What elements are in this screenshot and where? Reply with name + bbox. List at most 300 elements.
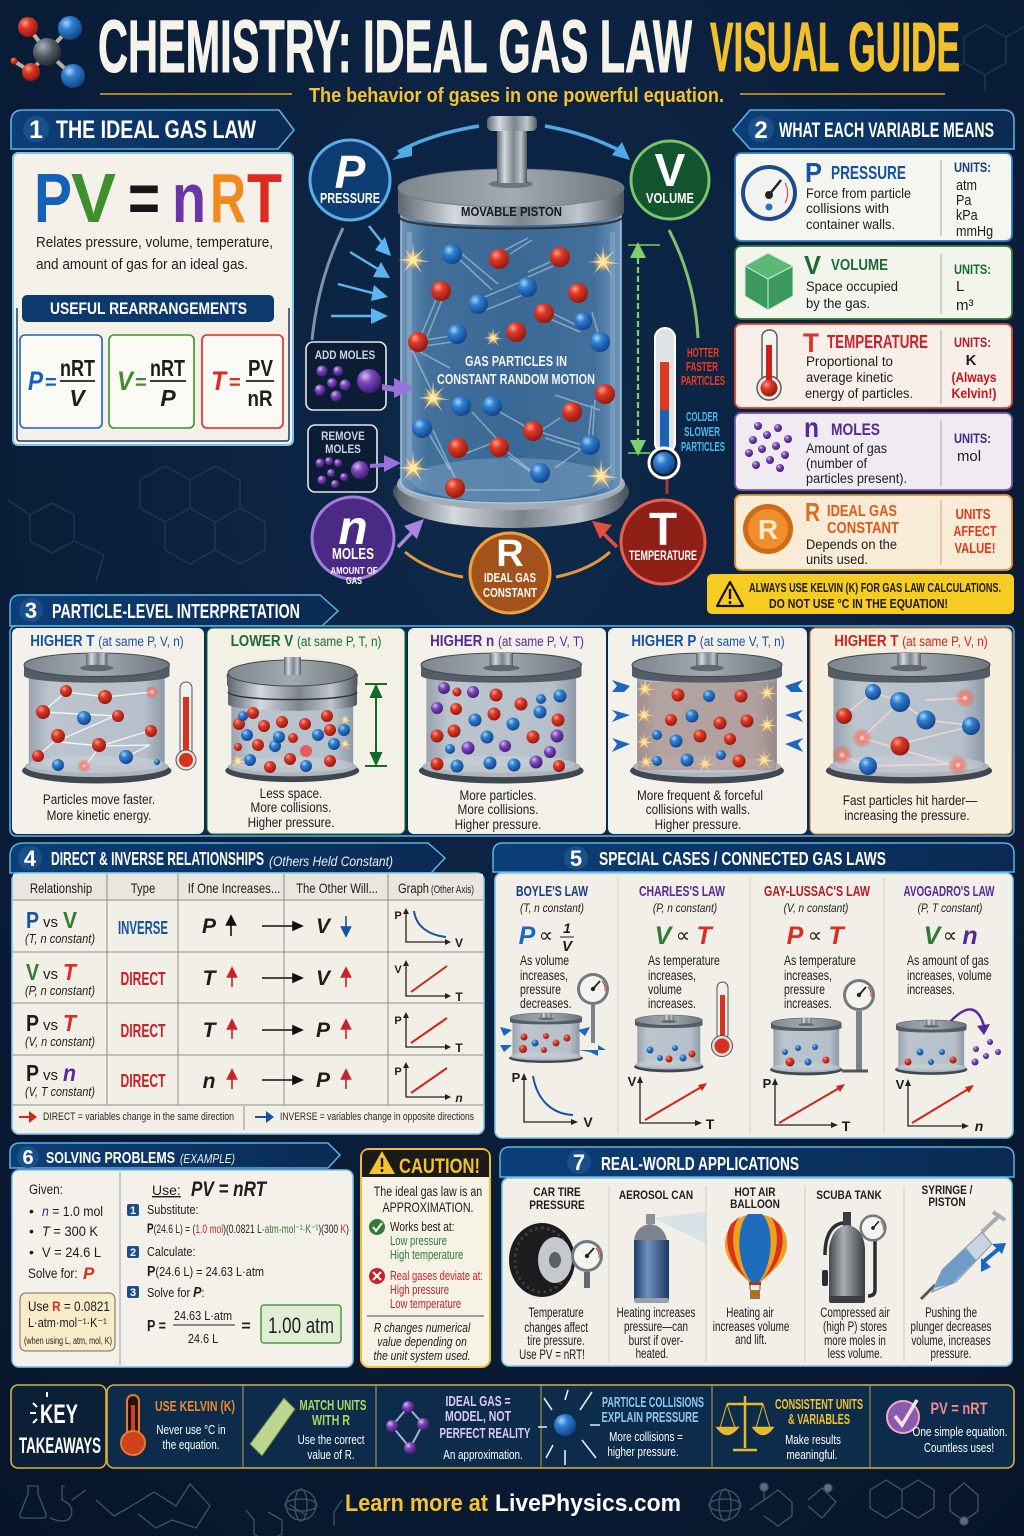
- graph: [896, 1077, 983, 1134]
- panel: the ideal gas law: [13, 153, 293, 445]
- column: Gay-Lussac's law: T: [828, 922, 846, 950]
- icon: thermometer: [757, 330, 781, 400]
- column: Boyle's law: 1: [563, 920, 571, 936]
- particle motion trails: [412, 238, 600, 490]
- takeaway: match units: MATCH UNITS: [300, 1397, 366, 1414]
- card: pressure: container walls.: [806, 217, 895, 232]
- row: P vs V: V: [63, 907, 78, 933]
- thermometer: [712, 982, 732, 1056]
- box: V equation: =: [135, 372, 147, 394]
- step 1: [127, 1202, 349, 1236]
- row: P vs T: DIRECT: [120, 1021, 166, 1041]
- card: temperature: [735, 324, 1012, 408]
- badge: moles: MOLES: [332, 546, 374, 563]
- takeaway: consistent units: meaningful.: [787, 1449, 837, 1462]
- icon: pressure gauge: [741, 165, 797, 221]
- takeaway: collisions: More collisions =: [609, 1431, 683, 1444]
- footer chemistry icons: [20, 1480, 978, 1536]
- card: pressure: atm: [956, 176, 977, 193]
- row: P vs T: P: [26, 1010, 39, 1036]
- section 3 heading: [10, 595, 338, 626]
- mini graph: inverse P V: [394, 908, 463, 950]
- rearrangements frame: [17, 308, 289, 441]
- row: P vs V: vs: [43, 914, 58, 931]
- takeaway: collisions: higher pressure.: [607, 1446, 679, 1459]
- box: P equation: P: [28, 366, 44, 396]
- mini graph: direct P T: T: [455, 1041, 463, 1055]
- remove moles box: REMOVE: [321, 430, 365, 443]
- takeaway: PV = nRT: PV = nRT: [930, 1399, 988, 1418]
- panel: caution: The ideal gas law is an: [374, 1184, 482, 1199]
- icon: volume cube: [745, 253, 793, 310]
- panel: higher T: Particles move faster.: [43, 791, 155, 807]
- R value note: L·atm·mol⁻¹·K⁻¹: [28, 1315, 107, 1330]
- row: P vs n: P: [26, 1060, 39, 1086]
- add moles box: ADD MOLES: [315, 349, 375, 362]
- graph: P: [763, 1076, 772, 1091]
- row: P vs V: INVERSE: [118, 918, 168, 938]
- panel: lower V: Less space.: [260, 785, 322, 801]
- cylinder caption: [437, 353, 595, 388]
- panel: lower V: LOWER V (at same P, T, n): [231, 633, 381, 650]
- column: Gay-Lussac's law: [763, 883, 875, 1134]
- application: syringe: volume, increases: [911, 1332, 991, 1348]
- column: Avogadro's law: V: [924, 922, 943, 950]
- row: P vs V: V: [316, 915, 332, 938]
- panel: higher T pressure: HIGHER T (at same P, V, n): [834, 633, 988, 650]
- hotter label: PARTICLES: [681, 373, 725, 388]
- application: aerosol can: burst if over-: [629, 1332, 683, 1348]
- row: P vs T: T: [203, 1019, 218, 1042]
- table header: [30, 881, 474, 896]
- application: scuba tank: SCUBA TANK: [816, 1189, 882, 1202]
- card: ideal gas constant: units used.: [806, 552, 868, 567]
- given values: V = 24.6 L: [42, 1244, 101, 1260]
- box: V equation: P: [160, 385, 176, 411]
- card: moles: (number of: [806, 456, 867, 471]
- mini graph: direct P T: P: [394, 1015, 402, 1027]
- card: ideal gas constant: [735, 495, 1012, 570]
- graph: V: [583, 1114, 593, 1130]
- mini graph: direct P n: P: [394, 1066, 402, 1078]
- takeaway: use Kelvin: [121, 1395, 235, 1455]
- box: T equation: nR: [248, 386, 273, 411]
- panel: lower V: Higher pressure.: [248, 814, 334, 830]
- takeaway: consistent units: & VARIABLES: [788, 1411, 850, 1428]
- column: Boyle's law: decreases.: [520, 996, 571, 1011]
- R value note: Use R = 0.0821: [28, 1298, 110, 1314]
- icon: cross: [369, 1268, 385, 1284]
- column: Avogadro's law: n: [962, 922, 978, 950]
- arrow: add moles: [382, 378, 414, 398]
- application: car tire: [509, 1186, 603, 1362]
- key takeaways strip: [11, 1385, 1014, 1468]
- formula PV = nRT: R: [210, 159, 246, 237]
- section 6 heading: SOLVING PROBLEMS: [46, 1150, 175, 1167]
- colder label: [681, 409, 725, 454]
- card: volume: Space occupied: [806, 278, 898, 294]
- application: aerosol can: pressure—can: [624, 1318, 688, 1334]
- legend: DIRECT = variables change in the same direction: [43, 1111, 234, 1123]
- card: temperature: Kelvin!): [952, 385, 996, 401]
- thermometer: [649, 328, 679, 478]
- card: pressure: mmHg: [956, 222, 993, 239]
- step 2: 2: [130, 1247, 136, 1259]
- column: Charles's law: ∝: [676, 925, 690, 947]
- row: P vs T: vs: [43, 1017, 58, 1034]
- panel: higher T: [12, 628, 204, 834]
- card: temperature: TEMPERATURE: [827, 332, 928, 352]
- badge: pressure: PRESSURE: [320, 190, 380, 207]
- key takeaways label: [11, 1385, 106, 1468]
- given values: [28, 1181, 103, 1283]
- answer box: 1.00 atm: [268, 1313, 334, 1338]
- box: V equation: V: [117, 366, 135, 396]
- table header: (Other Axis): [431, 884, 474, 896]
- panel: higher P: HIGHER P (at same V, T, n): [631, 633, 785, 650]
- add moles box: [306, 342, 386, 410]
- takeaway: match units: value of R.: [307, 1449, 355, 1462]
- formula description: and amount of gas for an ideal gas.: [36, 256, 248, 273]
- blue arrows: [500, 1027, 606, 1056]
- section 3 heading: PARTICLE-LEVEL INTERPRETATION: [52, 601, 300, 623]
- step 3: 3: [130, 1287, 136, 1299]
- mini graph: inverse P V: P: [394, 910, 402, 922]
- mini cylinder: [509, 1013, 583, 1063]
- mini graph: direct V T: V: [394, 964, 402, 976]
- step 2: [127, 1244, 264, 1280]
- table header: Relationship: [30, 881, 92, 896]
- column: Avogadro's law: [895, 883, 1001, 1134]
- column: Gay-Lussac's law: increases.: [784, 996, 832, 1011]
- subtitle: The behavior of gases in one powerful equation.: [309, 85, 724, 107]
- column: Gay-Lussac's law: pressure: [784, 982, 825, 997]
- takeaway: PV = nRT: Countless uses!: [924, 1442, 994, 1455]
- icon: syringe: [921, 1212, 1006, 1299]
- column: Gay-Lussac's law: (V, n constant): [784, 902, 849, 915]
- remove moles box: [308, 425, 377, 492]
- application: syringe: SYRINGE /: [922, 1184, 972, 1197]
- takeaway: match units: [250, 1397, 366, 1462]
- gas dots: [972, 1039, 1001, 1066]
- card: temperature: T: [803, 328, 819, 358]
- panel: higher P: collisions with walls.: [646, 801, 750, 817]
- column: Avogadro's law: ∝: [943, 925, 957, 947]
- takeaway: PV = nRT: [887, 1399, 1008, 1455]
- step 2: Calculate:: [147, 1244, 196, 1259]
- row: P vs V: [25, 907, 350, 946]
- card: temperature: (Always: [952, 369, 997, 385]
- icon: check badge: [887, 1400, 919, 1433]
- given values: T = 300 K: [42, 1223, 99, 1239]
- panel: caution: the unit system used.: [374, 1349, 470, 1363]
- badge: moles: [312, 497, 394, 587]
- takeaway: match units: Use the correct: [298, 1434, 365, 1447]
- card: moles: mol: [957, 448, 981, 465]
- answer box: [261, 1305, 341, 1343]
- section 6 heading: [10, 1143, 340, 1169]
- collision sparks: [634, 678, 778, 772]
- application: syringe: [911, 1184, 1006, 1361]
- mini cylinder: [895, 1020, 967, 1075]
- card: moles: [735, 412, 1012, 490]
- badge: volume: VOLUME: [646, 190, 694, 207]
- card: ideal gas constant: CONSTANT: [827, 520, 899, 537]
- section 5 heading: SPECIAL CASES / CONNECTED GAS LAWS: [599, 849, 886, 869]
- column: Boyle's law: [500, 883, 609, 1130]
- formula PV = nRT: n: [172, 159, 206, 237]
- formula PV = nRT: T: [247, 159, 282, 237]
- R value note: [20, 1293, 115, 1351]
- application: aerosol can: Heating increases: [617, 1304, 695, 1320]
- legend: [19, 1111, 474, 1123]
- card: moles: Amount of gas: [806, 441, 887, 456]
- takeaway: model: PERFECT REALITY: [440, 1425, 530, 1442]
- icon: balloon: [725, 1214, 787, 1299]
- application: syringe: PISTON: [928, 1196, 966, 1209]
- application: scuba tank: (high P) stores: [823, 1318, 887, 1334]
- column: Charles's law: CHARLES'S LAW: [639, 883, 726, 900]
- badge: pressure: [310, 140, 390, 220]
- application: scuba tank: [816, 1189, 890, 1361]
- column: Avogadro's law: increases.: [907, 982, 955, 997]
- box: P equation: V: [69, 385, 86, 411]
- graph: V: [628, 1074, 637, 1089]
- panel: caution: Real gases deviate at:: [390, 1268, 483, 1283]
- panel: higher P: Higher pressure.: [655, 816, 741, 832]
- badge: volume: V: [655, 144, 686, 196]
- panel: higher n: HIGHER n (at same P, V, T): [430, 633, 584, 650]
- row: P vs n: [25, 1060, 350, 1099]
- card: volume: [735, 246, 1012, 319]
- panel: higher n: [408, 628, 606, 834]
- step 3: Solve for P:: [147, 1283, 205, 1300]
- colder label: PARTICLES: [681, 439, 725, 454]
- graph: T: [842, 1118, 851, 1134]
- movable piston: MOVABLE PISTON: [461, 204, 562, 219]
- badge: ideal gas constant: IDEAL GAS: [484, 570, 536, 585]
- icon: ruler: [250, 1398, 295, 1456]
- column: Charles's law: As temperature: [648, 953, 720, 968]
- box: P equation: nRT: [60, 355, 95, 381]
- card: temperature: K: [966, 352, 977, 369]
- section 1 heading: [11, 110, 294, 149]
- icon: balance scales: [718, 1396, 772, 1450]
- application: syringe: plunger decreases: [911, 1318, 992, 1334]
- row: P vs T: P: [316, 1019, 331, 1042]
- row: P vs T: T: [63, 1010, 78, 1036]
- row: P vs V: P: [26, 907, 39, 933]
- card: temperature: Proportional to: [806, 354, 893, 369]
- step 1: Substitute:: [147, 1202, 199, 1217]
- blue compression arrows: [612, 680, 803, 752]
- graph: [628, 1074, 715, 1132]
- table header: If One Increases...: [188, 881, 280, 896]
- badge: volume: [631, 141, 709, 219]
- footer link: Learn more at: [345, 1490, 488, 1517]
- takeaway: use Kelvin: Never use °C in: [156, 1424, 226, 1437]
- badge: ideal gas constant: CONSTANT: [483, 585, 537, 600]
- application: car tire: PRESSURE: [529, 1199, 585, 1212]
- formula PV = nRT: P: [34, 159, 72, 237]
- card: volume: VOLUME: [831, 257, 888, 274]
- card: ideal gas constant: AFFECT: [954, 523, 996, 540]
- mini graph: direct P T: [394, 1012, 463, 1055]
- card: ideal gas constant: R: [805, 497, 820, 527]
- box: V equation: [109, 335, 194, 428]
- column: Charles's law: volume: [648, 982, 682, 997]
- row: P vs n: n: [203, 1070, 215, 1093]
- formula PV = nRT: V: [71, 159, 116, 237]
- application: car tire: tire pressure.: [527, 1332, 585, 1348]
- add-moles arrow: [950, 1009, 990, 1035]
- card: pressure: Pa: [956, 191, 972, 208]
- box: T equation: =: [229, 372, 241, 394]
- row: V vs T: T: [63, 959, 78, 985]
- panel: higher n: More collisions.: [458, 801, 538, 817]
- use equation: Use:: [152, 1182, 181, 1198]
- step 1: P(24.6 L) = (1.0 mol)(0.0821 L·atm·mol⁻¹·K⁻¹)(300 K): [147, 1220, 349, 1236]
- row: V vs T: [25, 959, 350, 998]
- use equation: PV = nRT: [191, 1178, 268, 1201]
- section 2 heading: 2: [754, 117, 768, 144]
- card: moles: particles present).: [806, 471, 907, 486]
- icon: warning triangle: [369, 1151, 395, 1174]
- key takeaways label: KEY: [40, 1399, 78, 1429]
- volume height arrow: [628, 242, 660, 456]
- section 4 heading: DIRECT & INVERSE RELATIONSHIPS: [51, 849, 264, 869]
- spark dots: [230, 713, 352, 768]
- icon: spray can: [634, 1212, 707, 1303]
- card: volume: L: [956, 278, 964, 295]
- molecule icon: [10, 16, 85, 88]
- card: pressure: collisions with: [806, 201, 889, 216]
- section 7 heading: REAL-WORLD APPLICATIONS: [601, 1154, 799, 1174]
- column: Boyle's law: As volume: [520, 953, 569, 968]
- panel: applications: [502, 1178, 1012, 1366]
- application: car tire: changes affect: [524, 1319, 589, 1335]
- row: P vs n: vs: [43, 1067, 58, 1084]
- application: scuba tank: more moles in: [824, 1332, 886, 1348]
- column: Boyle's law: V: [562, 938, 574, 955]
- column: Boyle's law: pressure: [520, 982, 561, 997]
- graph: P: [512, 1070, 521, 1085]
- panel: higher n: Higher pressure.: [455, 816, 541, 832]
- panel: lower V: [207, 628, 405, 834]
- legend: INVERSE = variables change in opposite directions: [280, 1111, 474, 1123]
- column: Charles's law: [628, 883, 732, 1132]
- column: Boyle's law: (T, n constant): [520, 902, 584, 915]
- given values: Solve for:: [28, 1265, 78, 1281]
- card: moles: UNITS:: [954, 430, 991, 446]
- panel: higher P: [608, 628, 807, 834]
- hotter label: HOTTER: [687, 345, 719, 360]
- badge: moles: AMOUNT OF: [330, 565, 378, 577]
- footer link: [345, 1490, 681, 1517]
- card: volume: UNITS:: [954, 261, 991, 277]
- panel: caution: APPROXIMATION.: [383, 1200, 473, 1215]
- panel: caution: Works best at:: [390, 1220, 455, 1234]
- given values: •: [29, 1223, 34, 1239]
- row: P vs n: P: [316, 1069, 331, 1092]
- step 3: =: [241, 1318, 251, 1335]
- given values: •: [29, 1244, 34, 1260]
- column: Gay-Lussac's law: GAY-LUSSAC'S LAW: [764, 883, 871, 900]
- application: scuba tank: Compressed air: [820, 1304, 890, 1320]
- step 3: P =: [147, 1318, 166, 1335]
- warning banner: always use Kelvin: [707, 574, 1014, 614]
- connector arcs and pressure arrows: [312, 126, 698, 577]
- section 7 heading: [500, 1147, 1014, 1177]
- icon: R medal: R: [758, 514, 778, 545]
- footer link: LivePhysics.com: [495, 1490, 681, 1517]
- panel: lower V: More collisions.: [251, 799, 331, 815]
- small thermometer: [176, 682, 196, 770]
- section 3 heading: 3: [25, 598, 37, 623]
- box: T equation: PV: [248, 355, 274, 381]
- graph: [512, 1070, 593, 1130]
- column: Avogadro's law: increases, volume: [907, 968, 992, 983]
- panel: caution: High pressure: [390, 1284, 449, 1297]
- main gas cylinder: [393, 116, 629, 528]
- card: pressure: [735, 153, 1012, 241]
- badge: ideal gas constant: [470, 533, 550, 613]
- formula description: [36, 234, 273, 273]
- takeaway: collisions: [538, 1390, 704, 1465]
- panel: caution: CAUTION!: [399, 1155, 480, 1178]
- section 2 heading: [733, 110, 1014, 149]
- card: volume: m³: [956, 297, 974, 314]
- column: Boyle's law: P: [519, 922, 536, 950]
- card: ideal gas constant: IDEAL GAS: [827, 503, 897, 520]
- icon: scuba tank: [822, 1212, 887, 1303]
- application: hot air balloon: HOT AIR: [734, 1186, 776, 1199]
- badge: pressure: P: [335, 146, 366, 198]
- section 1 heading: THE IDEAL GAS LAW: [56, 116, 256, 144]
- use equation: [152, 1178, 268, 1201]
- cylinder caption: CONSTANT RANDOM MOTION: [437, 371, 595, 388]
- useful rearrangements banner: [22, 295, 274, 322]
- movable piston: [398, 116, 624, 228]
- row: P vs n: n: [63, 1060, 76, 1086]
- application: hot air balloon: Heating air: [726, 1304, 774, 1320]
- section 4 heading: (Others Held Constant): [269, 853, 393, 869]
- badge: moles: GAS: [346, 575, 362, 587]
- panel: caution: Low temperature: [390, 1298, 461, 1311]
- column: Charles's law: V: [655, 922, 674, 950]
- row: V vs T: V: [316, 967, 332, 990]
- step 3: [127, 1283, 251, 1346]
- card: temperature: UNITS:: [954, 334, 991, 350]
- column: Boyle's law: ∝: [539, 925, 553, 947]
- panel: caution: High temperature: [390, 1249, 463, 1262]
- application: car tire: Use PV = nRT!: [519, 1346, 585, 1362]
- section 1 heading: 1: [29, 116, 43, 144]
- takeaway: consistent units: [718, 1396, 863, 1462]
- takeaway: model: IDEAL GAS =: [446, 1393, 511, 1410]
- collision sparks: [398, 243, 620, 490]
- relationships table: [12, 873, 484, 1134]
- hotter label: [681, 345, 725, 388]
- application: aerosol can: AEROSOL CAN: [619, 1189, 693, 1202]
- column: Boyle's law: increases,: [520, 968, 568, 983]
- application: hot air balloon: BALLOON: [730, 1198, 780, 1211]
- column: Gay-Lussac's law: ∝: [808, 925, 822, 947]
- step 2: P(24.6 L) = 24.63 L·atm: [147, 1263, 264, 1280]
- takeaway: collisions: PARTICLE COLLISIONS: [602, 1394, 704, 1411]
- application: hot air balloon: and lift.: [735, 1331, 767, 1347]
- gauge: [577, 973, 609, 1043]
